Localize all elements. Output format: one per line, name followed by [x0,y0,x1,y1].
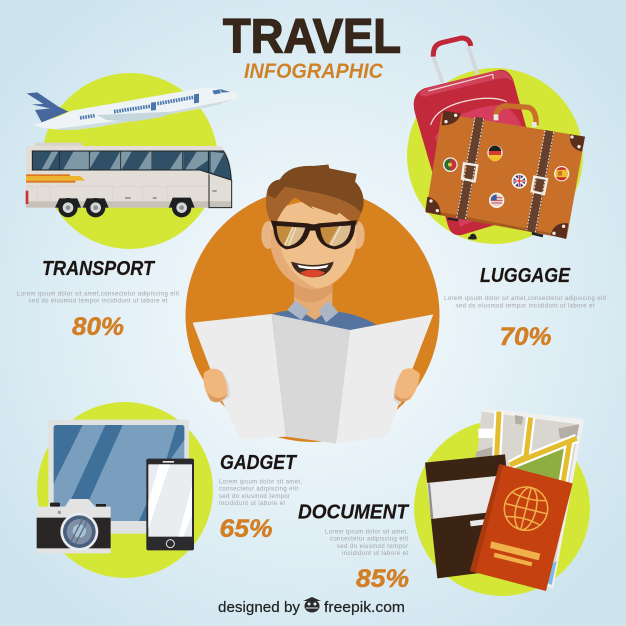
text: luggage description: sed do eiusmod tempor incididunt ut labore et [456,304,595,310]
hands [205,369,230,402]
circle: central orange [186,188,440,442]
neck [294,282,332,320]
icon: camera [37,499,111,553]
icon: boarding ticket [425,454,517,578]
percentage: gadget: 65% [220,515,272,543]
circle: document [414,420,590,596]
icon: tablet [48,420,189,534]
percentage: luggage: 70% [500,323,552,351]
icon: freepik logo [303,597,321,612]
percentage: document: 85% [356,565,409,593]
text: gadget description [219,480,302,507]
subtitle: INFOGRAPHIC [244,59,383,83]
circle: gadget [37,402,213,578]
sunglasses [271,220,357,249]
text: luggage description [444,296,606,310]
icon: folded map [463,408,584,588]
heading: document: DOCUMENT [298,500,409,524]
footer credit [218,597,405,616]
hair [266,165,364,225]
circle: luggage [407,68,583,244]
icon: brown suitcase [425,106,585,239]
icon: bus [26,143,232,217]
text: document description: incididunt ut labore et [342,551,408,557]
text: luggage description: Lorem ipsum dolor sit amet,consectetur adipiscing elit [444,296,606,302]
text: gadget description: Lorem ipsum dolor sit amet, [219,480,302,486]
heading: gadget: GADGET [220,451,297,474]
text: document description [325,530,408,557]
text: gadget description: incididunt ut labore et [219,501,285,507]
icon: smartphone [146,459,194,550]
footer credit: designed by [218,600,301,616]
circle: transport [42,73,218,249]
percentage: transport: 80% [72,313,124,341]
icon: red trolley luggage [414,38,533,240]
heading: luggage: LUGGAGE [480,264,571,287]
face [270,201,357,289]
text: transport description: Lorem ipsum dolor sit amet,consectetur adipiscing elit [17,292,179,298]
text: document description: consectetur adipiscing elit [330,536,408,542]
icon: passport [470,464,573,591]
map [193,314,286,439]
text: transport description [17,292,179,304]
text: gadget description: consectetur adipiscing elit [219,486,298,492]
icon: airplane [27,88,238,130]
collar [287,301,338,323]
text: gadget description: sed do eiusmod tempor [219,494,290,500]
text: document description: Lorem ipsum dolor sit amet, [325,530,408,536]
shirt [272,310,377,332]
title: TRAVEL [223,10,401,64]
stickers [443,145,569,208]
mouth [291,262,334,277]
ears [261,221,275,249]
text: transport description: sed do eiusmod tempor incididunt ut labore et [28,298,168,304]
text: document description: sed do eiusmod tempor [337,544,408,550]
illustration: man reading map [193,165,433,443]
footer credit: freepik.com [324,600,405,616]
heading: transport: TRANSPORT [42,257,155,280]
